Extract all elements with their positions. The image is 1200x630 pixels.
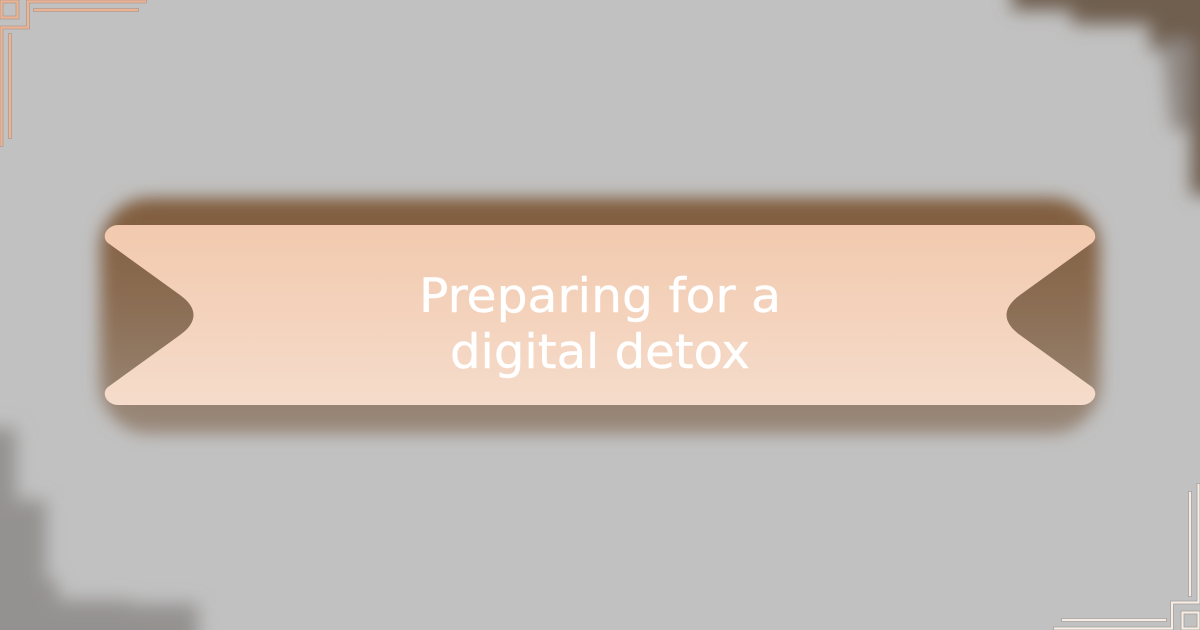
corner ornament: bottom right [1055, 485, 1198, 628]
title [419, 269, 781, 380]
blurred shadow: bottom left corner [0, 428, 198, 630]
title: Preparing for a [419, 269, 781, 324]
banner shadow [100, 198, 1100, 434]
ribbon banner [105, 225, 1095, 405]
corner ornament: top left [2, 2, 145, 145]
blurred shadow: top right corner [1012, 0, 1200, 195]
title: digital detox [450, 325, 750, 380]
